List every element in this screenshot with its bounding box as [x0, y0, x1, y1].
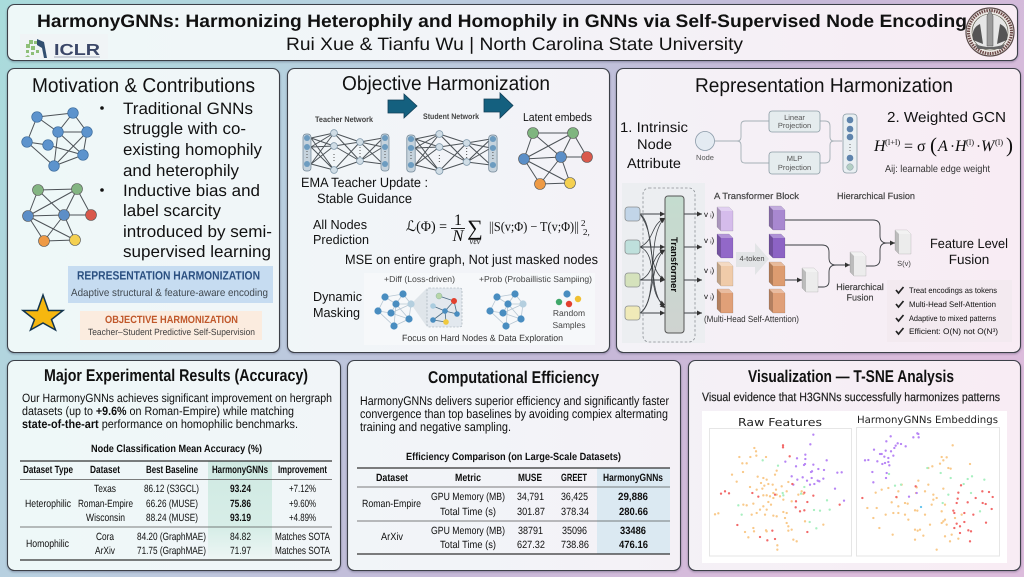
paragraph: efficiency summary: training and negative sampling.: [360, 420, 511, 434]
accuracy table: Best Baseline: [146, 464, 198, 476]
accuracy table: 93.19: [230, 512, 251, 524]
bullet list: Inductive bias and: [123, 182, 260, 200]
efficiency table: 301.87: [517, 506, 545, 518]
checklist: Adaptive to mixed patterns: [909, 314, 996, 323]
heading: visualization: Visualization — T-SNE Analysis: [748, 367, 954, 386]
transformer diagram: Hierarchical: [836, 282, 884, 292]
callout: representation harmonization: REPRESENTATION HARMONIZATION: [77, 268, 260, 282]
label: dynamic masking: [313, 289, 362, 320]
efficiency table: 38791: [518, 525, 543, 537]
efficiency table: 35096: [562, 525, 587, 537]
accuracy table: 66.26 (MUSE): [146, 498, 198, 510]
callout: objective harmonization: [80, 311, 262, 340]
node projection diagram: [696, 111, 857, 174]
formula: weighted GCN: (l): [966, 137, 974, 147]
formula: weighted GCN: (l+l): [885, 137, 900, 147]
transformer diagram: Transformer: [668, 237, 679, 292]
arrow: teacher to student: [388, 94, 417, 118]
formula: weighted GCN: (l): [995, 137, 1003, 147]
efficiency table: Efficiency Comparison (on Large-Scale Datasets): [406, 451, 621, 463]
formula: loss: vεv: [470, 236, 481, 246]
transformer diagram: v ᵢ): [704, 292, 714, 301]
efficiency table: 476.16: [619, 539, 648, 551]
icon: heterophilic graph: [22, 184, 96, 246]
title: HarmonyGNNs: Harmonizing Heterophily and Homophily in GNNs via Self-Supervised Node Encoding: [37, 11, 967, 31]
accuracy table: +4.89%: [289, 512, 316, 524]
ICLR logo: [20, 34, 108, 59]
node projection diagram: MLP: [787, 154, 802, 163]
formula note: Aij: learnable edge weight: [885, 164, 990, 175]
student network diagram: Student Network: [423, 112, 479, 121]
accuracy table: 84.20 (GraphMAE): [137, 531, 206, 543]
ICLR logo: ICLR: [54, 42, 101, 59]
efficiency table: Total Time (s): [440, 539, 496, 551]
panel: objective harmonization: [288, 68, 610, 352]
efficiency table: 280.66: [619, 506, 648, 518]
paragraph: results summary: Our HarmonyGNNs achieves significant improvement on hergraph: [22, 391, 332, 405]
formula: loss: 2,: [583, 227, 590, 237]
efficiency table: 34,791: [517, 491, 544, 503]
paragraph: results summary: [22, 391, 332, 431]
heading: representation harmonization: Representation Harmonization: [695, 75, 953, 97]
accuracy table: 75.86: [230, 498, 251, 510]
accuracy table: 71.75 (GraphMAE): [137, 545, 206, 557]
latent embeddings graph: Latent embeds: [523, 112, 592, 124]
dynamic masking diagram: +Diff (Loss-driven): [384, 274, 455, 284]
formula: weighted GCN: (: [930, 133, 937, 157]
formula: weighted GCN: A: [937, 138, 948, 155]
efficiency table: Dataset: [376, 472, 408, 484]
accuracy table: Matches SOTA: [275, 531, 330, 543]
accuracy table: +9.60%: [289, 498, 316, 510]
efficiency table: [357, 451, 670, 554]
formula: loss: ∑: [467, 215, 483, 240]
icon: star: [23, 295, 63, 330]
student network diagram: [407, 112, 497, 174]
bullet list: and heterophily: [123, 162, 240, 180]
text: all nodes prediction: Prediction: [313, 232, 369, 247]
bullet list: label scarcity: [123, 202, 222, 220]
formula: weighted GCN: W: [981, 138, 996, 155]
node projection diagram: Linear: [784, 113, 805, 122]
text: all nodes prediction: All Nodes: [313, 217, 367, 232]
accuracy table: Wisconsin: [86, 512, 125, 524]
text: all nodes prediction: [313, 217, 369, 247]
efficiency table: ArXiv: [381, 531, 404, 543]
accuracy table: 71.97: [230, 545, 251, 557]
dynamic masking diagram: Samples: [552, 320, 586, 330]
bullet list: supervised learning: [123, 243, 271, 261]
efficiency table: 36,425: [561, 491, 588, 503]
panel: major experimental results: [8, 360, 340, 570]
text: intrinsic node attribute: Node: [637, 136, 672, 152]
label: dynamic masking: Dynamic: [313, 289, 362, 304]
efficiency table: 33486: [620, 525, 646, 537]
text: feature level fusion: Feature Level: [930, 236, 1008, 251]
checklist: [887, 280, 1012, 342]
accuracy table: +7.12%: [289, 483, 316, 495]
transformer diagram: v ᵢ): [704, 210, 714, 219]
header panel: [8, 4, 1018, 60]
formula: loss: N: [451, 226, 464, 245]
efficiency table: Total Time (s): [440, 506, 496, 518]
accuracy table: ArXiv: [95, 545, 116, 557]
chart: HarmonyGNNs embeddings scatter: HarmonyGNNs Embeddings: [857, 415, 998, 426]
callout: objective harmonization: OBJECTIVE HARMONIZATION: [105, 314, 238, 326]
bullet list: introduced by semi-: [123, 223, 272, 241]
bullet list: existing homophily: [123, 141, 263, 159]
formula: weighted GCN: ·: [976, 139, 981, 155]
efficiency table: Metric: [455, 472, 481, 484]
accuracy table: 84.82: [230, 531, 251, 543]
paragraph: efficiency summary: HarmonyGNNs delivers superior efficiency and significantly faster: [360, 394, 669, 408]
icon: homophilic graph: [22, 108, 92, 171]
heading: motivation: Motivation & Contributions: [32, 75, 255, 97]
efficiency table: 738.86: [561, 539, 589, 551]
checklist: Efficient: O(N) not O(N³): [909, 327, 998, 336]
efficiency table: HarmonyGNNs: [603, 472, 663, 484]
dynamic masking diagram: +Prob (Probaillistic Sampiing): [479, 274, 592, 284]
latent embeddings graph: [518, 112, 592, 190]
panel: motivation and contributions: [8, 68, 280, 352]
callout: representation harmonization: Adaptive structural & feature-aware encoding: [71, 287, 268, 299]
accuracy table: HarmonyGNNs: [212, 464, 268, 476]
transformer diagram: Fusion: [846, 292, 874, 302]
transformer diagram: v ᵢ): [704, 266, 714, 275]
text: intrinsic node attribute: Attribute: [627, 155, 681, 171]
accuracy table: 93.24: [230, 483, 251, 495]
text: MSE note: MSE on entire graph, Not just masked nodes: [345, 252, 598, 267]
accuracy table: Dataset Type: [23, 464, 73, 476]
accuracy table: Improvement: [278, 464, 327, 476]
formula: weighted GCN: ): [1006, 133, 1013, 157]
formula: loss: 2: [581, 218, 586, 228]
efficiency table: 378.34: [561, 506, 589, 518]
authors: Rui Xue & Tianfu Wu | North Carolina State University: [286, 34, 743, 54]
bullet list: struggle with co-: [123, 120, 246, 138]
formula: loss: 1: [454, 212, 462, 229]
text: feature level fusion: [930, 236, 1008, 267]
paragraph: efficiency summary: [360, 394, 669, 434]
paragraph: results summary: state-of-the-art performance on homophilic benchmarks.: [22, 417, 298, 431]
panel: t-SNE visualization: [688, 360, 1020, 570]
transformer diagram: v ᵢ): [704, 236, 714, 245]
text: EMA teacher update: [301, 175, 428, 206]
heading: experimental results: Major Experimental Results (Accuracy): [44, 366, 308, 385]
paragraph: efficiency summary: convergence than top baselines by avoiding compiex altermating: [360, 407, 668, 421]
transformer diagram: S(v): [897, 259, 911, 268]
node projection diagram: Projection: [778, 121, 811, 130]
accuracy table: [20, 443, 332, 560]
callout: representation harmonization: [68, 266, 273, 303]
accuracy table: 86.12 (S3GCL): [144, 483, 199, 495]
text: intrinsic node attribute: 1. Intrinsic: [620, 119, 688, 135]
label: dynamic masking: Masking: [313, 305, 360, 320]
accuracy table: Texas: [94, 483, 116, 495]
formula: weighted GCN: = σ: [904, 138, 926, 155]
accuracy table: Homophilic: [26, 538, 69, 550]
heading: objective harmonization: Objective Harmonization: [342, 73, 550, 95]
efficiency table: 29,886: [618, 491, 648, 503]
arrow: student to embeddings: [484, 93, 513, 118]
callout: objective harmonization: Teacher–Student Predictive Self-Supervision: [88, 327, 255, 337]
text: EMA teacher update: Stable Guidance: [317, 191, 412, 206]
formula: weighted GCN: H: [873, 138, 887, 155]
accuracy table: Dataset: [90, 464, 120, 476]
efficiency table: MUSE: [518, 472, 542, 484]
checklist: Multi-Head Self-Attention: [909, 300, 996, 309]
accuracy table: Heterophilic: [25, 498, 71, 510]
formula: weighted GCN: ·: [950, 139, 955, 155]
transformer diagram: [622, 183, 915, 343]
chart: HarmonyGNNs embeddings scatter: [856, 415, 1000, 556]
node projection diagram: Node: [696, 153, 714, 162]
teacher network diagram: [303, 115, 389, 173]
chart: raw features scatter: [710, 416, 852, 556]
heading: computational efficiency: Computational Efficiency: [428, 368, 599, 387]
panel: computational efficiency: [348, 360, 680, 570]
formula: loss: ||S(v;Φ) − T(v;Φ)||: [489, 219, 579, 234]
efficiency table: GPU Memory (MB): [431, 491, 505, 503]
accuracy table: Roman-Empire: [78, 498, 133, 510]
transformer diagram: (Multi-Head Self-Attention): [704, 314, 799, 324]
formula: weighted GCN: H: [954, 138, 968, 155]
efficiency table: 627.32: [517, 539, 545, 551]
dynamic masking diagram: Random: [553, 308, 585, 318]
teacher network diagram: Teacher Network: [315, 115, 374, 124]
paragraph: results summary: datasets (up to +9.6% on Roman-Empire) while matching: [22, 404, 294, 418]
checklist: Treat encodings as tokens: [909, 286, 997, 295]
university seal: [966, 8, 1014, 56]
efficiency table: GPU Memory (MB): [431, 525, 505, 537]
transformer diagram: A Transformer Block: [714, 191, 800, 201]
node projection diagram: Projection: [778, 163, 811, 172]
chart: raw features scatter: Raw Features: [738, 416, 822, 429]
dynamic masking diagram: Focus on Hard Nodes & Data Exploration: [402, 333, 563, 343]
efficiency table: GREET: [561, 472, 587, 484]
dynamic masking diagram: [364, 273, 595, 345]
formula: weighted GCN: [873, 133, 1013, 157]
formula: loss: [406, 212, 590, 246]
t-SNE charts: [702, 411, 1007, 563]
accuracy table: Matches SOTA: [275, 545, 330, 557]
bullet list: [100, 100, 272, 261]
efficiency table: Roman-Empire: [362, 498, 421, 510]
accuracy table: Cora: [96, 531, 114, 543]
text: EMA teacher update: EMA Teacher Update :: [301, 175, 428, 190]
accuracy table: 88.24 (MUSE): [146, 512, 198, 524]
text: feature level fusion: Fusion: [949, 252, 989, 267]
formula: loss: ℒ(Φ) =: [406, 219, 447, 235]
text: weighted GCN: 2. Weighted GCN: [887, 110, 1006, 126]
panel: representation harmonization: [616, 68, 1020, 352]
transformer diagram: Hierarchical Fusion: [837, 191, 915, 201]
accuracy table: Node Classification Mean Accuracy (%): [91, 443, 262, 455]
transformer diagram: 4-token: [739, 254, 765, 263]
text: intrinsic node attribute: [620, 119, 688, 171]
bullet list: Traditional GNNs: [123, 100, 253, 118]
